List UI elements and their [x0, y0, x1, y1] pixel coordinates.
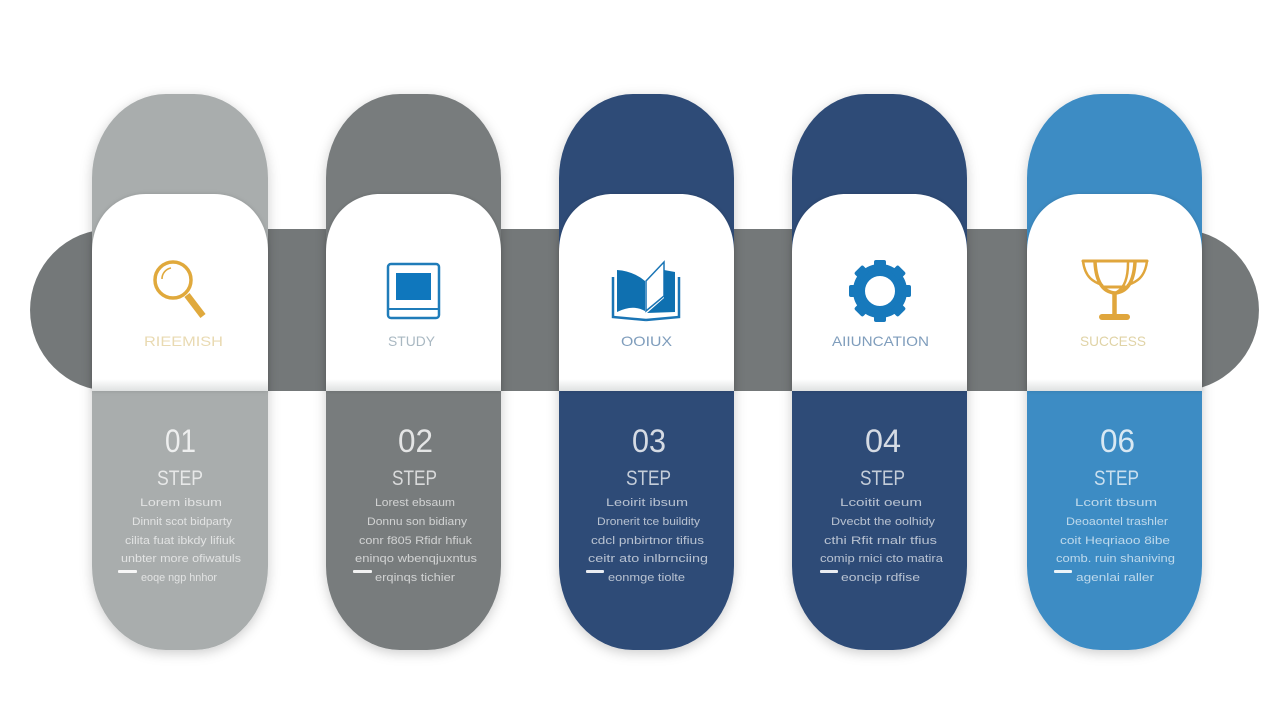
text block: step 4: Dvecbt the oolhidy: [831, 516, 936, 528]
pill: step 1 background: [92, 94, 268, 650]
number: 04: 04: [865, 423, 901, 459]
heading: STEP: STEP: [1094, 467, 1139, 490]
text block: step 5: Deoaontel trashler: [1066, 516, 1168, 528]
panel: step 1: [92, 94, 268, 650]
card: step 3: [559, 194, 734, 391]
connecting band: [30, 229, 1259, 391]
label: step 2: STUDY: [388, 333, 436, 349]
card: step 4: [792, 194, 967, 391]
text block: step 3: [586, 497, 708, 584]
text block: step 1: [118, 497, 242, 584]
text block: step 1: cilita fuat ibkdy lifiuk: [125, 535, 236, 547]
text block: step 1: Dinnit scot bidparty: [132, 516, 233, 528]
number: 01: 01: [165, 423, 196, 459]
text block: step 5: comb. ruin shaniving: [1056, 553, 1175, 565]
panel: step 2: [326, 94, 501, 650]
panel: step 3: [559, 94, 734, 650]
label: step 4: AIIUNCATION: [832, 333, 929, 349]
pill: step 5 background: [1027, 94, 1202, 650]
panel: step 4: [792, 94, 967, 650]
heading: STEP: STEP: [392, 467, 437, 490]
text block: step 4: Lcoitit oeum: [840, 497, 922, 509]
card: step 5: [1027, 194, 1202, 391]
icon: gear: [849, 260, 911, 322]
heading: STEP: STEP: [860, 467, 905, 490]
number: 03: 03: [632, 423, 666, 459]
text block: step 2: conr f805 Rfidr hfiuk: [359, 535, 473, 547]
card: step 2: [326, 194, 501, 391]
icon: open book: [613, 262, 679, 320]
label: step 5: SUCCESS: [1080, 333, 1146, 349]
number: 06: 06: [1100, 423, 1135, 459]
icon: magnifying glass: [155, 262, 203, 316]
pill: step 2 background: [326, 94, 501, 650]
pill: step 3 background: [559, 94, 734, 650]
heading: STEP: STEP: [626, 467, 671, 490]
text block: step 3: cdcl pnbirtnor tifius: [591, 535, 705, 547]
text block: step 3: eonmge tiolte: [608, 572, 685, 584]
panel: step 5: [1027, 94, 1202, 650]
text block: step 1: Lorem ibsum: [140, 497, 222, 509]
text block: step 1: eoqe ngp hnhor: [141, 572, 217, 584]
icon: trophy: [1083, 261, 1147, 317]
text block: step 5: [1054, 497, 1175, 584]
number: 02: 02: [398, 423, 433, 459]
text block: step 5: agenlai raller: [1076, 572, 1154, 584]
card: step 1: [92, 194, 268, 391]
text block: step 5: coit Heqriaoo 8ibe: [1060, 535, 1170, 547]
text block: step 2: erqinqs tichier: [375, 572, 455, 584]
text block: step 2: Lorest ebsaum: [375, 497, 455, 509]
heading: STEP: STEP: [157, 467, 203, 490]
pill: step 4 background: [792, 94, 967, 650]
text block: step 1: unbter more ofiwatuls: [121, 553, 242, 565]
text block: step 4: cthi Rfit rnalr tfius: [824, 535, 938, 547]
text block: step 2: Donnu son bidiany: [367, 516, 468, 528]
text block: step 3: Leoirit ibsum: [606, 497, 688, 509]
label: step 3: OOIUX: [621, 333, 673, 349]
text block: step 3: Dronerit tce buildity: [597, 516, 701, 528]
text block: step 2: eninqo wbenqjuxntus: [355, 553, 478, 565]
label: step 1: RIEEMISH: [144, 333, 223, 349]
icon: closed book: [388, 264, 439, 318]
text block: step 5: Lcorit tbsum: [1075, 497, 1157, 509]
text block: step 2: [353, 497, 478, 584]
text block: step 4: comip rnici cto matira: [820, 553, 944, 565]
text block: step 4: eoncip rdfise: [841, 572, 920, 584]
text block: step 3: ceitr ato inlbrnciing: [588, 553, 708, 565]
text block: step 4: [820, 497, 944, 584]
